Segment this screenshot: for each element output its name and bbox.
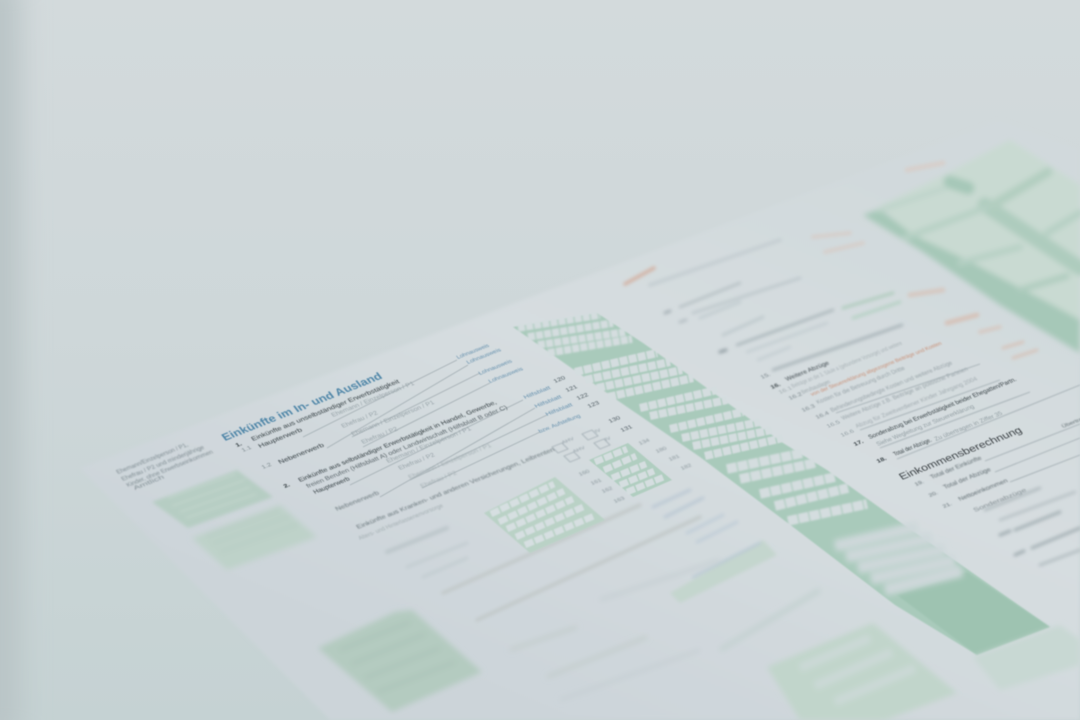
panel: lowest faint rows [510, 560, 820, 700]
solid green block [897, 572, 1050, 655]
text block: AHV checkboxes: IV [594, 428, 603, 434]
panel: right page text in focus: Siehe Wegleitung zur Steuererklärung [874, 403, 976, 447]
panel: green note box 2 [192, 505, 317, 570]
panel: left page text slightly soft: Ehefrau / P2 [418, 469, 458, 489]
panel: right page text in focus: Zu übertragen in Ziffer 35 [932, 410, 1004, 442]
text block: further deductions: Berufsauslagen [799, 378, 832, 395]
text block: second block: Einkünfte aus Kranken- und anderen Versicherungen, Leibrenten [354, 446, 556, 530]
text block: further deductions: 16. [769, 382, 782, 390]
text block: codes: 122 [575, 392, 590, 401]
text block: AHV checkboxes [561, 428, 613, 454]
text block: second block: Nebenerwerb [333, 489, 381, 512]
text block: column codes: 182 [680, 463, 693, 471]
text block: further deductions: Kosten für die Betreuung durch Dritte [814, 364, 906, 405]
text block: references: Hilfsblatt [544, 402, 574, 417]
icon: grid large [484, 477, 605, 553]
text block: side note: Kinder, ohne Erwerbseinkommen [124, 448, 215, 488]
paper sheet [80, 120, 1080, 720]
panel: left form rules [303, 360, 547, 497]
left dark shadow [0, 0, 20, 720]
text block: line items [234, 378, 509, 495]
text block: further deductions: 16.2 [787, 391, 804, 401]
panel: left page text in focus [219, 343, 634, 495]
text block: codes: 120 [552, 375, 567, 384]
text block: income calculation: Total der Abzüge [941, 466, 993, 490]
text block: spouse labels: Ehefrau / P2 [359, 425, 399, 445]
rules: right page [836, 364, 1080, 482]
text block: spouse labels: Ehemann / Einzelperson / P1 [349, 399, 436, 437]
text block: side note: Ehefrau / P2 und minderjährige [119, 444, 206, 482]
panel: pale green strip bottom right [973, 625, 1080, 690]
text block: references: Lohnausweis [487, 366, 525, 384]
text block: AHV checkboxes: IV [604, 436, 613, 442]
text block: codes [552, 375, 634, 433]
heading: Einkünfte im In- und Ausland: Einkünfte im In- und Ausland [219, 371, 385, 443]
text block: column codes: 180 [655, 446, 669, 454]
panel: green note box 1 [152, 470, 273, 528]
text block: deductions: Total der Abzüge. [891, 436, 933, 457]
text block: AHV checkboxes: AHV [572, 446, 587, 454]
text block: spouse labels: Ehefrau / P2 [339, 409, 379, 429]
text block: income calculation: Sonderabzüge [971, 486, 1028, 513]
text block: spouse labels: Ehemann / Einzelperson / P1 [384, 425, 473, 464]
text block: further deductions: 16.4 [814, 410, 831, 420]
panel: right page blurred upper rows [625, 163, 1037, 370]
text block: spouse labels: Ehefrau / P2 [396, 451, 436, 471]
text block: line items: 1.2 [260, 462, 274, 470]
text block: line items: Nebenerwerb [276, 441, 326, 465]
text block: further deductions: Weitere Abzüge [783, 359, 831, 382]
text block: line items: 1. [234, 441, 244, 448]
text block: line items: Einkünfte aus selbständiger Erwerbstätigkeit in Handel, Gewerbe, [296, 399, 498, 483]
text block: references: bzw. Aufstellung [537, 413, 582, 434]
panel: right page text in focus: 16.5 [825, 419, 842, 429]
text block: line items: Einkünfte aus unselbständiger Erwerbstätigkeit [249, 378, 401, 442]
text block: references: Lohnausweis [455, 343, 491, 360]
text block: spouse labels [329, 380, 473, 471]
text block: column codes: 161 [590, 478, 603, 486]
text block: references: Lohnausweis [477, 359, 514, 376]
text block: income calculation: 19. [914, 480, 926, 487]
icon: grid bottom right [767, 623, 957, 720]
text block: codes: 131 [619, 424, 634, 433]
text block: side note: Ehemann/Einzelperson / P1, [114, 441, 190, 475]
text block: deductions: 18. [875, 456, 888, 464]
panel: green note box 3 [318, 610, 482, 712]
text block: further deductions: 16.3 [800, 403, 817, 413]
text block: further deductions: 16.1 [777, 385, 794, 395]
panel: right page text in focus: 16.6 [839, 428, 856, 438]
text block: AHV checkboxes: AHV [561, 437, 576, 445]
text block: further deductions [759, 340, 979, 429]
text block: income calculation [914, 415, 1080, 513]
panel: bottom blurred form rows [387, 490, 777, 620]
text block: deductions [852, 376, 1018, 464]
text block: column codes: 181 [668, 454, 681, 462]
text block: line items: Haupterwerb [311, 475, 351, 495]
text block: references: Lohnausweis [465, 347, 503, 365]
text block: income calculation: Nettoeinkommen [956, 477, 1009, 502]
panel: top right green table [863, 140, 1080, 353]
text block: further deductions: Beiträge an die 3. Säule a (gebundene Vorsorge) und weitere [789, 340, 904, 389]
panel: right page text slightly soft [759, 340, 1080, 513]
panel: left page text slightly soft [114, 428, 693, 541]
text block: income calculation: 21. [942, 502, 954, 509]
panel: left page text slightly soft: Ehemann / Einzelperson / P1 [406, 442, 493, 480]
heading: Einkommensberechnung: Einkommensberechnung [897, 425, 1025, 482]
text block: references: Hilfsblatt [533, 394, 563, 409]
text block: column codes [578, 438, 693, 504]
text block: spouse labels: Ehemann / Einzelperson / P1 [329, 380, 416, 418]
text block: codes: 121 [564, 384, 579, 393]
text block: side note [114, 441, 215, 491]
text block: income calculation: 20. [928, 491, 940, 498]
cell rows [518, 315, 962, 590]
icon: grid small [589, 443, 672, 497]
text block: column codes: 163 [613, 496, 626, 504]
column background [513, 313, 1050, 655]
text block: references [455, 343, 582, 434]
panel: main green table column [513, 313, 1050, 655]
text block: further deductions: Abzug für Zweitverdiener Kinder Jahrgang 2004 [853, 375, 979, 429]
text block: column codes: 162 [601, 486, 614, 494]
text block: codes: 130 [607, 415, 622, 424]
text block: references: Hilfsblatt [522, 385, 552, 400]
text block: line items: freien Berufen (Hilfsblatt A) oder Landwirtschaft (Hilfsblatt B oder C) [304, 404, 509, 489]
text block: deductions: Sonderabzug bei Erwerbstätigkeit beider Ehegatten/Partn. [866, 376, 1018, 440]
text block: column codes: 160 [578, 469, 592, 477]
text block: codes: 123 [586, 400, 601, 409]
text block: income calculation: Total der Einkünfte [928, 454, 983, 480]
icon: checkboxes [552, 430, 610, 462]
text block: side note: Amtlich [131, 473, 166, 491]
text block: further deductions: 15. [759, 372, 772, 380]
panel: right page text in focus [825, 376, 1025, 482]
text block: line items: 1.1 [240, 445, 254, 453]
text block: further deductions: von der Steuererklärung abgezogene Beiträge und Kosten [809, 341, 944, 397]
panel: left page text slightly soft: Alters- und Hinterlassenenvorsorge [356, 502, 445, 541]
panel: right page lower blurred rows [985, 488, 1080, 565]
text block: column codes: 134 [638, 438, 652, 446]
text block: deductions: 17. [852, 439, 865, 447]
text block: line items: 2. [282, 482, 292, 489]
text block: further deductions: Behinderungsbedingte Kosten und weitere Abzüge [828, 359, 954, 413]
text block: line items: Haupterwerb [256, 426, 304, 449]
text block: further deductions: Weitere Abzüge z.B. Beiträge an politische Parteien [839, 365, 970, 421]
